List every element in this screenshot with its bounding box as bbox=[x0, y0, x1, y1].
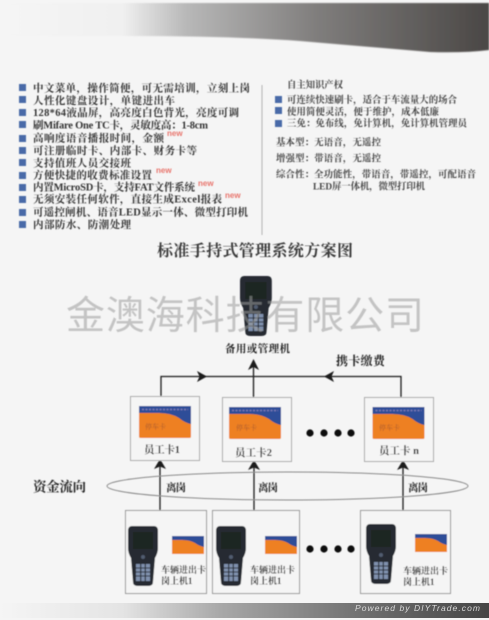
top gradient banner bbox=[0, 3, 489, 52]
employee card n bbox=[364, 398, 434, 462]
terminal box 2: 岗上机1 bbox=[250, 575, 282, 586]
divider line bbox=[261, 85, 263, 235]
feature bullets bbox=[19, 84, 26, 228]
panel: product specs: LED屏一体机，微型打印机 bbox=[313, 180, 426, 192]
ellipsis dots upper bbox=[306, 429, 355, 437]
terminal box 2: 车辆进出卡 bbox=[250, 564, 295, 575]
employee card 2: 员工卡2 bbox=[235, 446, 272, 459]
feature text: 方便快捷的收费标准设置 bbox=[33, 168, 152, 182]
feature text: 可注册临时卡、内部卡、财务卡等 bbox=[33, 144, 198, 157]
panel: product specs: 基本型：无语音，无遥控 bbox=[276, 136, 382, 148]
panel: product specs: 增强型：带语音，无遥控 bbox=[276, 152, 382, 164]
feature text: 内置MicroSD卡，支持FAT文件系统 bbox=[33, 180, 196, 194]
panel: product specs: 可连续快速刷卡，适合于车流量大的场合 bbox=[287, 94, 458, 106]
panel: product specs: 使用简便灵活，便于维护，成本低廉 bbox=[287, 106, 440, 118]
terminal box 1: 车辆进出卡 bbox=[161, 564, 206, 575]
title: 标准手持式管理系统方案图 bbox=[157, 241, 353, 260]
terminal box 2 bbox=[212, 510, 300, 594]
feature text bbox=[33, 82, 250, 231]
panel: product specs bbox=[275, 79, 476, 192]
employee card n: 停车卡 bbox=[379, 423, 400, 432]
bottom gradient band bbox=[0, 603, 489, 618]
feature text: 无须安装任何软件，直接生成Excel报表 bbox=[33, 192, 222, 206]
feature text: 人性化键盘设计，单键进出车 bbox=[33, 94, 176, 107]
terminal box 3: 车辆进出卡 bbox=[403, 565, 448, 576]
icon: backup handheld device bbox=[240, 276, 272, 336]
watermark: 金澳海科技有限公司 bbox=[66, 295, 424, 338]
employee card 1: 停车卡 bbox=[145, 422, 166, 431]
new badges: new bbox=[225, 191, 241, 200]
flow ellipse bbox=[107, 472, 468, 500]
panel: feature list bbox=[19, 82, 250, 231]
employee card 2 bbox=[222, 398, 292, 462]
new badges: new bbox=[156, 166, 172, 175]
feature text: 可遥控闸机、语音LED显示一体、微型打印机 bbox=[33, 206, 248, 218]
employee card 1: 员工卡1 bbox=[144, 443, 180, 456]
feature text: 内部防水、防潮处理 bbox=[33, 218, 132, 231]
new badges: new bbox=[167, 129, 183, 138]
employee card 1 bbox=[130, 396, 200, 460]
feature text: 支持值班人员交接班 bbox=[33, 156, 132, 170]
feature text: 刷Mifare One TC卡，灵敏度高：1-8cm bbox=[33, 118, 208, 132]
connector lines and arrows bbox=[154, 359, 409, 510]
feature text: 高响度语音播报时间，金额 bbox=[33, 132, 164, 144]
panel: product specs: 综合性：全功能性，带语音，带遥控，可配语音 bbox=[276, 168, 476, 180]
ellipsis dots lower bbox=[306, 545, 355, 553]
employee card n: 员工卡 n bbox=[379, 444, 419, 457]
feature text: 中文菜单，操作简便，可无需培训，立刻上岗 bbox=[33, 82, 250, 94]
employee card 2: 停车卡 bbox=[236, 423, 257, 432]
spec bullets bbox=[275, 96, 282, 127]
labels: leave post: 离岗 bbox=[408, 481, 428, 494]
labels: leave post bbox=[166, 481, 428, 494]
terminal box 3 bbox=[360, 510, 450, 594]
terminal box 3: 岗上机1 bbox=[403, 576, 435, 587]
feature text: 128*64液晶屏，高亮度白色背光，亮度可调 bbox=[33, 106, 240, 119]
label: carry card to pay: 携卡缴费 bbox=[336, 353, 386, 368]
new badges: new bbox=[198, 179, 214, 188]
new badges bbox=[156, 129, 241, 200]
panel: product specs: 自主知识产权 bbox=[287, 79, 344, 91]
panel: product specs: 三免：免布线，免计算机，免计算机管理员 bbox=[287, 118, 469, 130]
terminal box 1: 岗上机1 bbox=[161, 575, 193, 586]
label: backup machine: 备用或管理机 bbox=[225, 342, 290, 355]
labels: leave post: 离岗 bbox=[258, 481, 278, 494]
label: fund flow: 资金流向 bbox=[33, 478, 86, 494]
footer credit: Powered by DIYTrade.com bbox=[355, 603, 480, 613]
terminal box 1 bbox=[126, 510, 206, 594]
labels: leave post: 离岗 bbox=[166, 481, 186, 494]
